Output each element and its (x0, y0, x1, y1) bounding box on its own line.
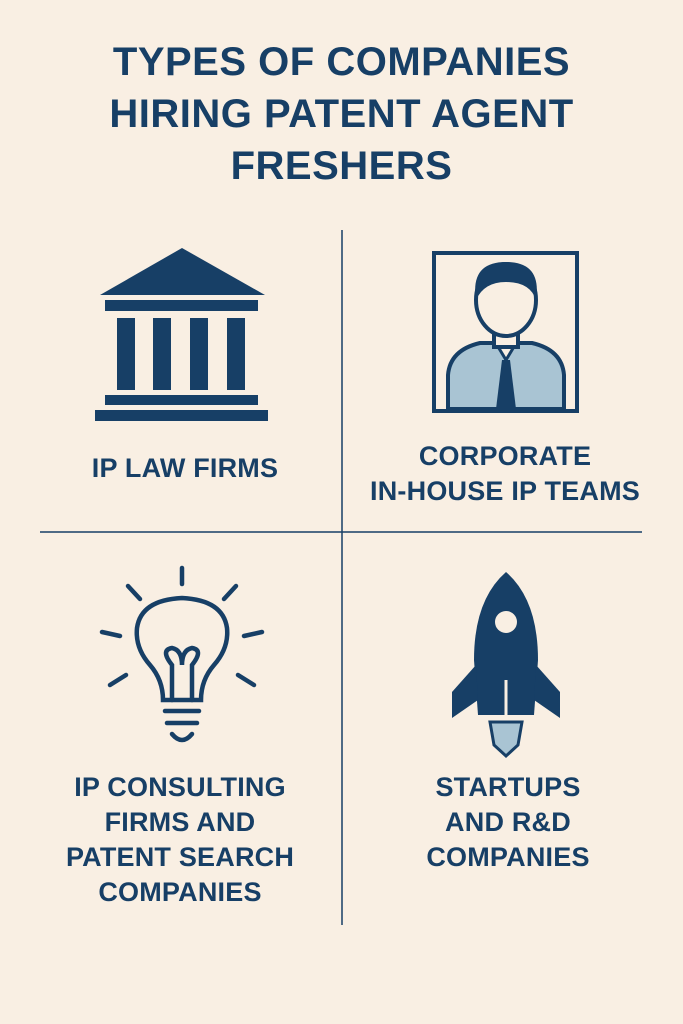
title: HIRING PATENT AGENT (109, 92, 574, 136)
title (109, 40, 574, 188)
title: FRESHERS (231, 144, 452, 188)
icon: light bulb (102, 568, 262, 740)
label: startups and R&D: AND R&D (445, 807, 571, 837)
label: IP consulting firms (66, 772, 294, 907)
label: startups and R&D: COMPANIES (426, 842, 590, 872)
label: startups and R&D (426, 772, 590, 872)
label: IP consulting firms: PATENT SEARCH (66, 842, 294, 872)
label: IP consulting firms: FIRMS AND (105, 807, 255, 837)
label: corporate in-house IP teams: IN-HOUSE IP TEAMS (370, 476, 640, 506)
label: IP law firms: IP LAW FIRMS (92, 453, 278, 483)
label: startups and R&D: STARTUPS (435, 772, 581, 802)
icon: bank building (95, 248, 268, 421)
icon: person portrait (434, 253, 577, 411)
title: TYPES OF COMPANIES (113, 40, 570, 84)
label: corporate in-house IP teams: CORPORATE (419, 441, 591, 471)
label: corporate in-house IP teams (370, 441, 640, 506)
label: IP consulting firms: IP CONSULTING (74, 772, 286, 802)
label: IP consulting firms: COMPANIES (98, 877, 262, 907)
icon: rocket (452, 572, 560, 756)
